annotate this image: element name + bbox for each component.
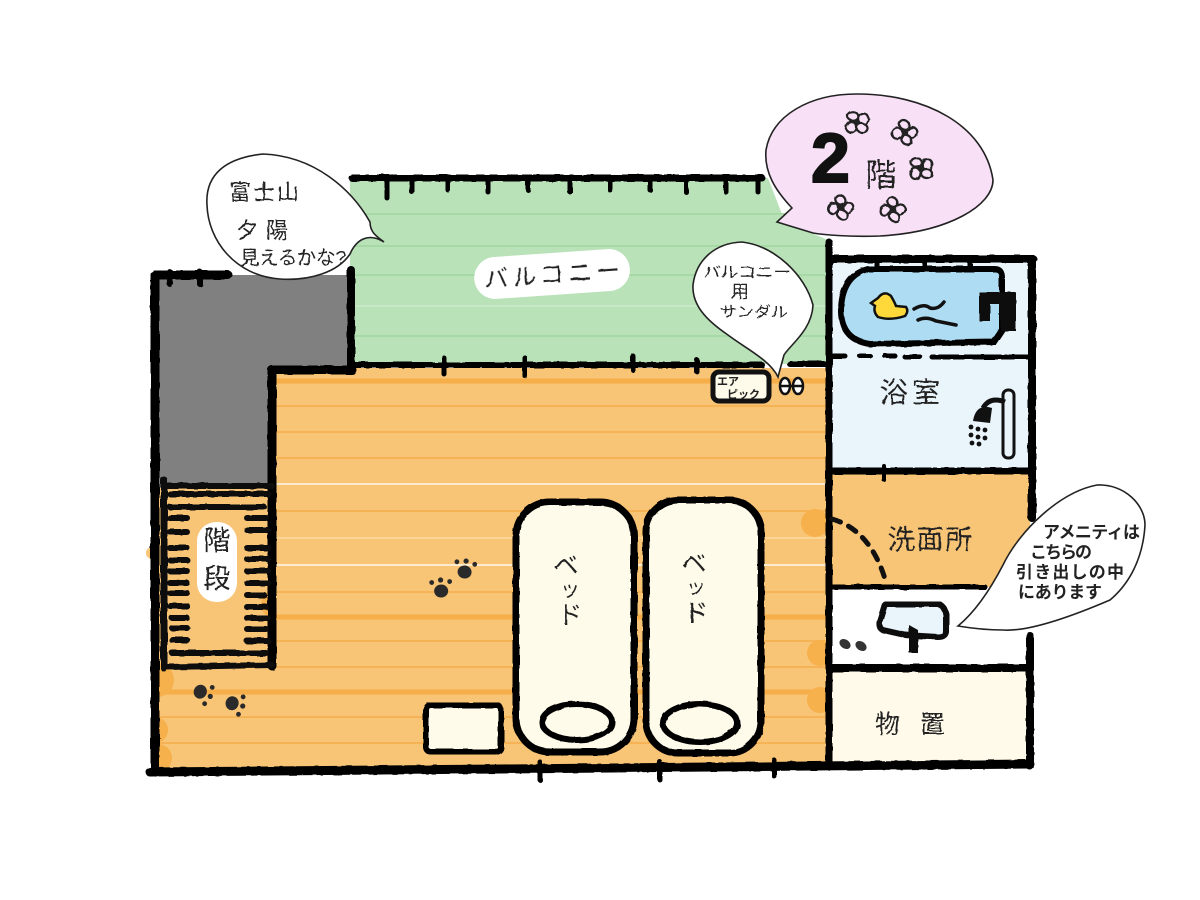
speech bubble: Mt Fuji view bbox=[207, 154, 384, 279]
panel: sink area bbox=[830, 590, 1030, 666]
slippers bbox=[838, 637, 868, 653]
paw prints lower bbox=[190, 679, 248, 718]
door swing bbox=[832, 519, 885, 579]
bed left bbox=[516, 502, 634, 752]
icon: flowers bbox=[826, 111, 933, 225]
water ripples bbox=[914, 302, 956, 325]
bathtub bbox=[841, 269, 1002, 344]
speech bubble: balcony sandals: バルコニー bbox=[703, 264, 791, 281]
speech bubble: amenities: こちらの bbox=[1030, 543, 1092, 562]
speech bubble: amenities: アメニティは bbox=[1043, 523, 1140, 542]
stairs label: 段 bbox=[204, 564, 230, 594]
bathroom label: 浴室 bbox=[880, 377, 940, 408]
floor kanji: 階 bbox=[865, 157, 897, 193]
speech bubble: amenities: にあります bbox=[1018, 583, 1102, 602]
icon: shower bbox=[969, 390, 1014, 458]
speech bubble: 2nd floor bbox=[766, 94, 993, 236]
walls bbox=[150, 178, 1033, 780]
bed left label: ッ bbox=[560, 579, 580, 601]
panel: storage bbox=[830, 670, 1030, 767]
speech bubble: amenities: 引き出しの中 bbox=[1016, 563, 1124, 582]
bed right label bbox=[681, 550, 709, 628]
air conditioner bbox=[713, 372, 769, 401]
icon: faucet bbox=[979, 292, 1016, 331]
speech bubble: Mt Fuji view: 見えるかな? bbox=[240, 248, 346, 269]
storage label: 物置 bbox=[875, 711, 945, 739]
paw prints upper bbox=[429, 557, 478, 598]
panel: washroom bbox=[830, 474, 1030, 587]
speech bubble: Mt Fuji view: 富士山 bbox=[229, 180, 299, 205]
panel: grey void bbox=[155, 275, 350, 488]
air conditioner: エア bbox=[717, 375, 739, 388]
sink bbox=[879, 604, 946, 653]
air conditioner: ピック bbox=[727, 388, 760, 401]
speech bubble: amenities bbox=[958, 485, 1145, 630]
panel: bedroom floor bbox=[140, 368, 833, 772]
speech bubble: balcony sandals: サンダル bbox=[720, 304, 788, 321]
balcony label: バルコニー bbox=[483, 257, 621, 294]
side table bbox=[426, 705, 501, 752]
bed left label: ベ bbox=[553, 552, 579, 580]
balcony label bbox=[473, 248, 631, 300]
stairs label: 階 bbox=[204, 526, 230, 556]
bed right label: ベ bbox=[681, 550, 707, 578]
stairs bbox=[164, 480, 272, 668]
panel: balcony bbox=[350, 178, 828, 364]
speech bubble: balcony sandals bbox=[693, 242, 813, 377]
floor plan illustration bbox=[146, 93, 1146, 783]
stairs label bbox=[197, 522, 237, 602]
bed right label: ッ bbox=[686, 577, 706, 599]
icon: rubber duck bbox=[871, 293, 907, 319]
washroom label: 洗面所 bbox=[888, 525, 972, 555]
bed right bbox=[646, 500, 761, 753]
speech bubble: Mt Fuji view: 夕陽 bbox=[236, 218, 288, 243]
bed left label: ド bbox=[557, 602, 583, 630]
bed left label bbox=[553, 552, 583, 630]
bed right label: ド bbox=[683, 600, 709, 628]
panel: bathroom bbox=[830, 262, 1030, 470]
floor number: 2 bbox=[811, 119, 850, 197]
speech bubble: balcony sandals: 用 bbox=[731, 282, 749, 302]
sandals bbox=[780, 378, 803, 394]
